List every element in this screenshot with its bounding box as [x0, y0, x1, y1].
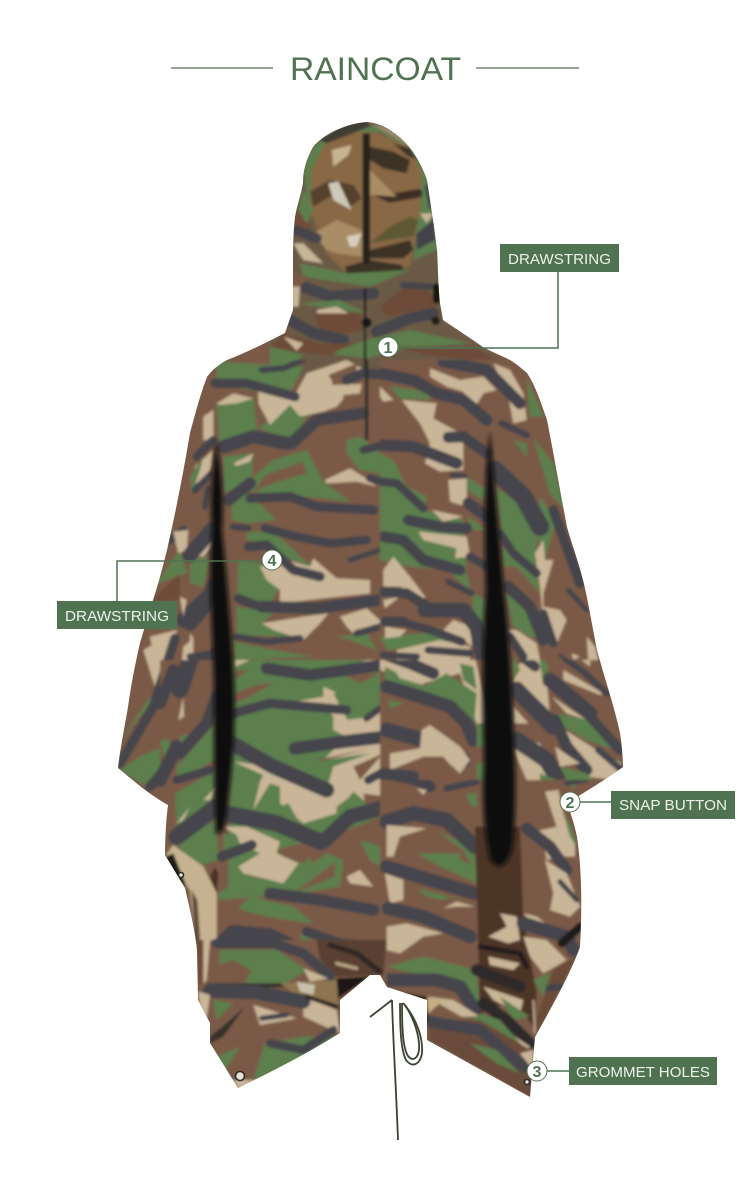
callout 2: snap button: 2 [566, 795, 575, 812]
callout 4: drawstring: 4 [268, 553, 277, 570]
callout 3: grommet holes: 3 [533, 1064, 542, 1081]
lower right body camouflage [378, 778, 590, 1096]
hood and collar camouflage [269, 122, 500, 376]
callout 3: grommet holes [527, 1057, 717, 1085]
callout 4: drawstring [57, 550, 282, 629]
upper left body camouflage [190, 360, 390, 660]
bottom hem and lower flap [190, 940, 387, 1100]
lower left body camouflage [160, 660, 390, 960]
callout 4: drawstring: DRAWSTRING [65, 609, 169, 625]
callout 3: grommet holes: GROMMET HOLES [576, 1065, 710, 1081]
left sleeve camouflage [120, 530, 217, 787]
middle right body camouflage [378, 658, 623, 782]
callout 1: drawstring: DRAWSTRING [508, 252, 611, 268]
title: RAINCOAT [290, 51, 461, 87]
upper right body camouflage [378, 359, 600, 662]
callout 1: drawstring: 1 [384, 340, 393, 357]
callout 2: snap button [560, 791, 735, 819]
fold shadows [210, 430, 515, 866]
grommet holes [178, 872, 530, 1084]
callout 2: snap button: SNAP BUTTON [619, 798, 727, 814]
callout 1: drawstring [378, 244, 619, 357]
drawstring cord [370, 1000, 422, 1140]
raincoat illustration: camouflage poncho [118, 122, 623, 1097]
